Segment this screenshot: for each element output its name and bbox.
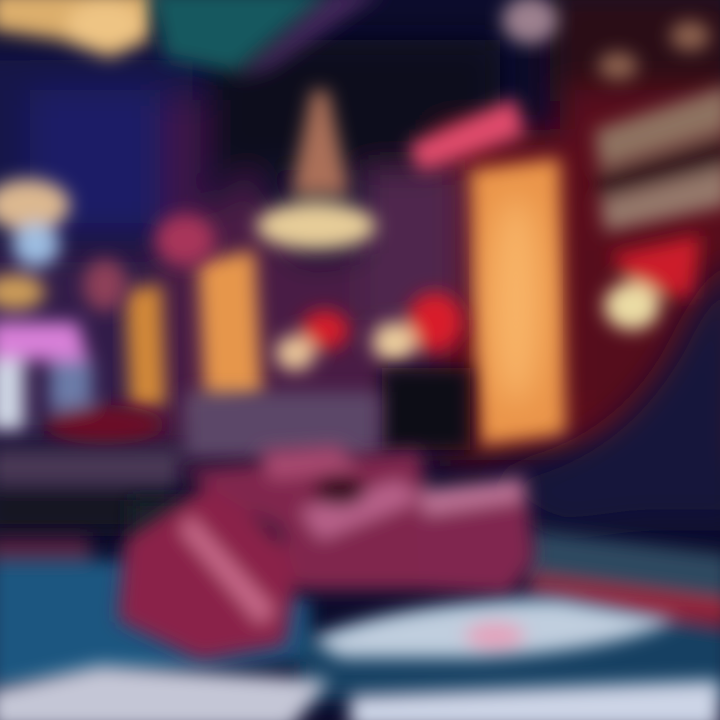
large orange pillar (470, 158, 566, 445)
ceiling panel: teal (150, 0, 385, 80)
wall panels: right (595, 85, 720, 232)
chandelier: center (256, 90, 376, 250)
pillar glow (490, 195, 542, 405)
table rail (0, 392, 380, 530)
dark curved foreground shape (490, 260, 720, 530)
neon sign (408, 98, 525, 172)
dark box (382, 368, 470, 450)
dice pile (118, 445, 535, 660)
orange pillar: middle (198, 250, 262, 418)
background: upper room (0, 0, 720, 460)
ceiling lights: top right (598, 21, 710, 80)
red panel and lamp: right (604, 235, 700, 330)
orange pillar: left (125, 284, 166, 410)
poker chip (312, 600, 675, 658)
blue table felt (0, 500, 720, 700)
left side lights (0, 179, 215, 445)
chandelier: top left (0, 0, 155, 58)
red and white lamps (275, 292, 463, 371)
pale ceiling light (502, 0, 558, 44)
playing cards: bottom (0, 665, 720, 720)
